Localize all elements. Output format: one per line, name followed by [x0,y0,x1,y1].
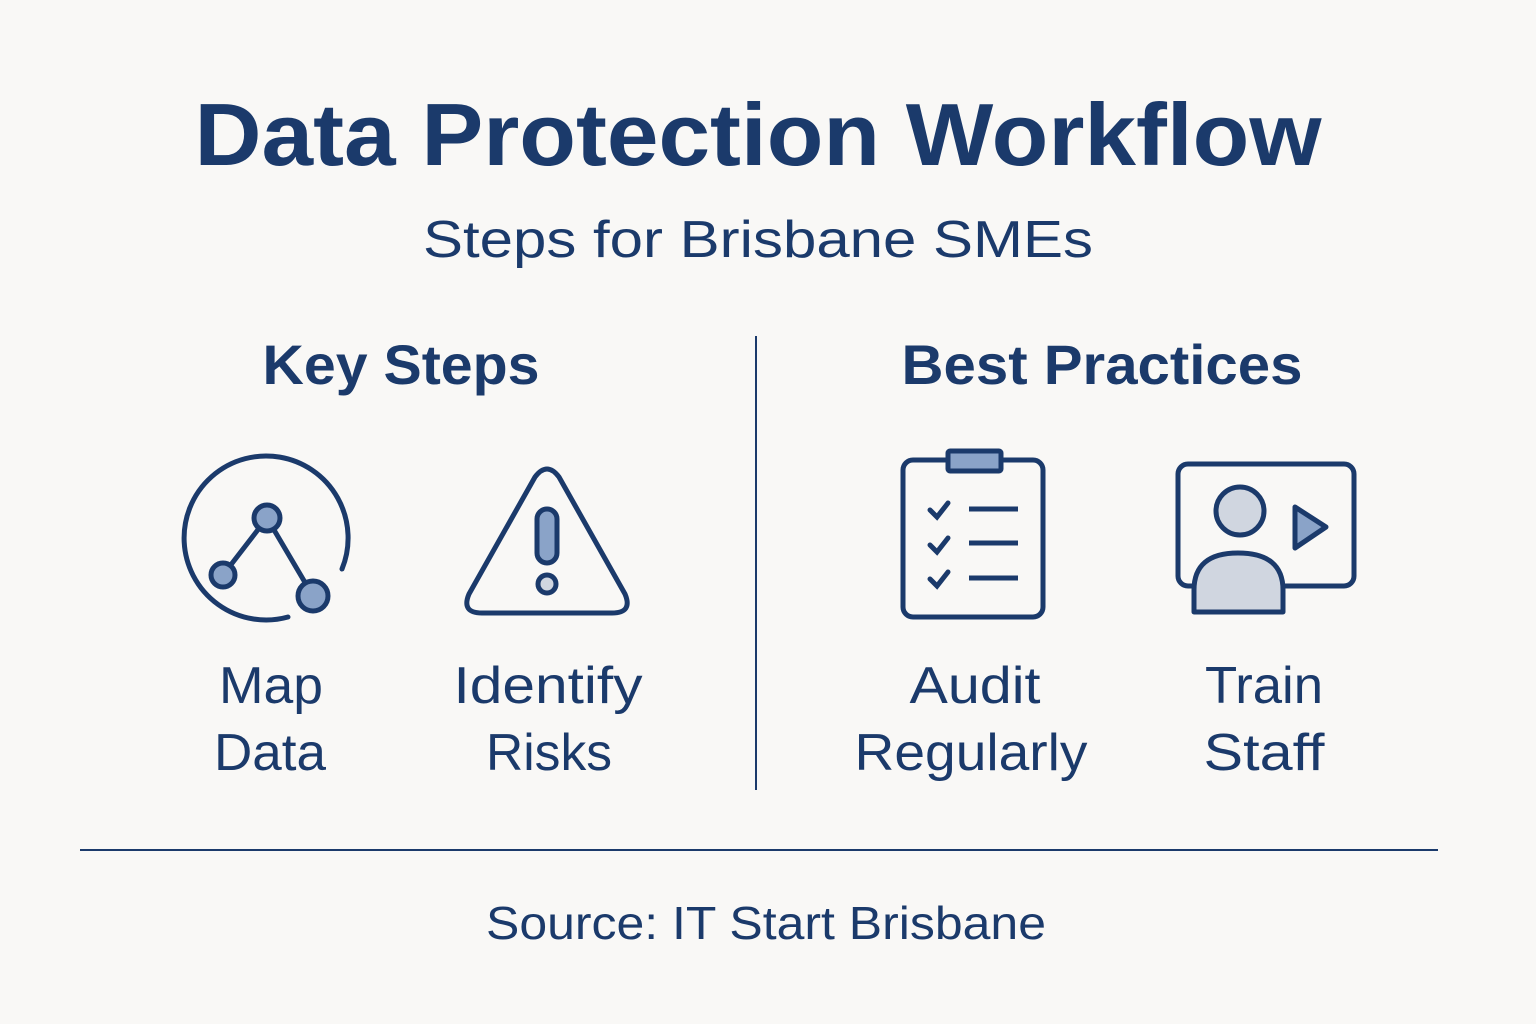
icon: warning triangle [467,469,627,613]
label: identify risks: Risks [486,724,612,782]
label: train staff: Train [1205,657,1323,715]
label: map data: Map [219,657,323,715]
label: train staff: Staff [1204,724,1325,782]
label: audit regularly: Audit [910,657,1041,715]
label: identify risks: Identify [454,657,642,715]
icon: clipboard [903,451,1043,617]
label: map data: Data [214,724,326,782]
icon: training video [1178,464,1354,612]
source: Source: IT Start Brisbane [486,897,1046,949]
icon: map data [184,456,348,620]
heading: best practices: Best Practices [902,333,1302,396]
heading: key steps: Key Steps [262,333,540,396]
title: Data Protection Workflow [194,85,1322,184]
label: audit regularly: Regularly [854,724,1088,782]
subtitle: Steps for Brisbane SMEs [423,211,1093,269]
